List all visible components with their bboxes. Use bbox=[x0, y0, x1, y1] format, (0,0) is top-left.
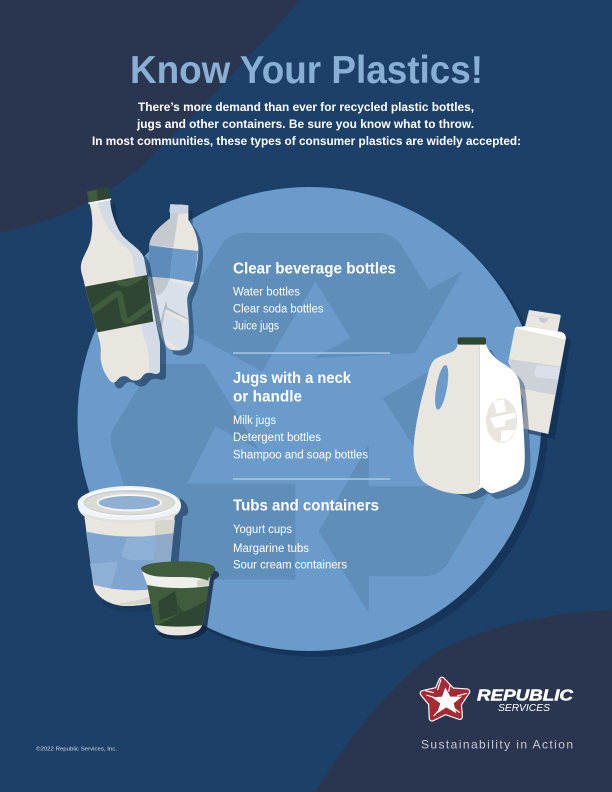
icon: detergent bottle bbox=[508, 310, 571, 439]
icon: clear bottle bbox=[147, 204, 203, 356]
section: clear beverage bottles: Water bottles bbox=[233, 286, 300, 298]
section: clear beverage bottles: Juice jugs bbox=[233, 320, 279, 332]
bottom-right dark shape bbox=[315, 610, 612, 792]
intro text: In most communities, these types of consumer plastics are widely accepted: bbox=[92, 134, 521, 148]
title: Know Your Plastics! bbox=[130, 49, 483, 92]
intro text bbox=[92, 100, 521, 148]
circle panel with recycling symbol bbox=[78, 187, 542, 651]
top-left dark shape bbox=[0, 0, 300, 232]
icon: star logo bbox=[423, 679, 467, 718]
section: clear beverage bottles: Clear beverage bottles bbox=[233, 260, 396, 278]
logo: Republic Services bbox=[421, 679, 574, 752]
section: tubs and containers: Tubs and containers bbox=[233, 498, 379, 514]
section: jugs with a neck or handle bbox=[233, 370, 368, 462]
icon: milk jug bbox=[414, 337, 530, 499]
section: jugs with a neck or handle: Detergent bottles bbox=[233, 432, 321, 444]
intro text: jugs and other containers. Be sure you know what to throw. bbox=[136, 117, 474, 131]
section: tubs and containers: Margarine tubs bbox=[233, 543, 309, 555]
circle shadow bbox=[84, 193, 548, 657]
section: clear beverage bottles bbox=[233, 260, 396, 332]
section: jugs with a neck or handle: Jugs with a neck bbox=[233, 370, 351, 387]
section: tubs and containers bbox=[233, 498, 379, 572]
section: jugs with a neck or handle: Shampoo and soap bottles bbox=[233, 450, 368, 462]
icon: large tub bbox=[78, 486, 188, 612]
logo: Republic Services: Sustainability in Action bbox=[421, 738, 573, 752]
icon: small green cup bbox=[141, 561, 219, 639]
copyright: ©2022 Republic Services, Inc. bbox=[36, 746, 118, 752]
logo: Republic Services: SERVICES bbox=[498, 703, 551, 714]
section: tubs and containers: Sour cream containers bbox=[233, 560, 347, 572]
logo: Republic Services: REPUBLIC bbox=[477, 688, 574, 704]
section: jugs with a neck or handle: or handle bbox=[233, 388, 302, 406]
icon: green-label bottle bbox=[81, 187, 166, 388]
intro text: There’s more demand than ever for recycled plastic bottles, bbox=[138, 100, 474, 114]
section: tubs and containers: Yogurt cups bbox=[233, 524, 292, 536]
section: jugs with a neck or handle: Milk jugs bbox=[233, 415, 276, 427]
section: clear beverage bottles: Clear soda bottles bbox=[233, 304, 324, 316]
jug logo bbox=[486, 398, 517, 443]
